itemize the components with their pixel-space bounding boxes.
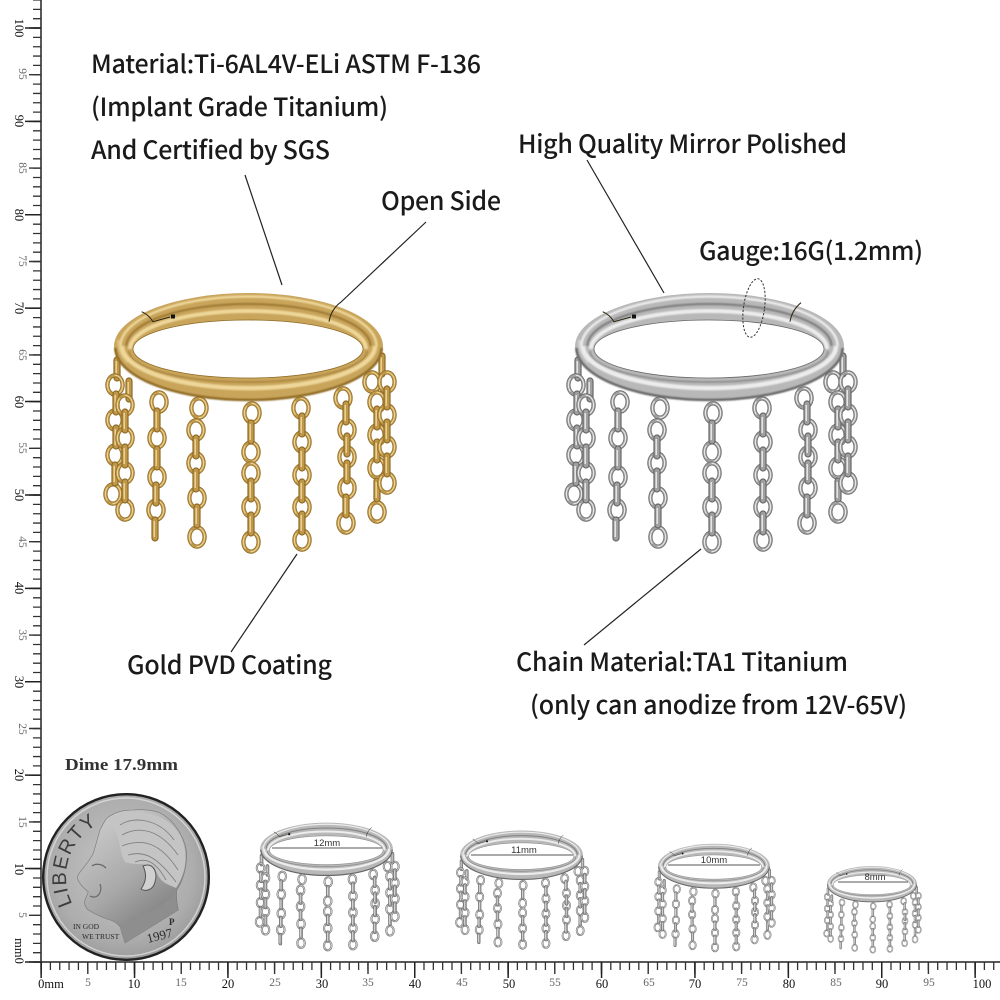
12mm ring: 12mm [314,838,340,849]
vertical ruler: 35 [16,629,28,641]
vertical ruler: 45 [16,536,28,548]
10mm ring: 10mm [701,855,727,866]
material specification text [91,45,481,167]
vertical ruler: 80 [12,209,26,221]
8mm ring: 8mm [864,872,886,883]
vertical ruler: 20 [12,769,26,781]
leader lines [231,160,701,652]
horizontal ruler [38,962,1000,991]
horizontal ruler: 35 [362,977,374,989]
vertical ruler: 95 [16,68,28,80]
vertical ruler: 100 [12,19,26,37]
gauge dotted ellipse [739,277,769,339]
vertical ruler: 65 [16,349,28,361]
label: gauge: Gauge:16G(1.2mm) [699,232,923,268]
horizontal ruler: 40 [409,977,421,991]
horizontal ruler: 100 [973,977,991,991]
label: chain material: Chain Material:TA1 Titanium [516,643,848,679]
label: gold coating: Gold PVD Coating [127,646,333,682]
11mm ring: 11mm [511,845,537,856]
vertical ruler: 40 [12,582,26,594]
horizontal ruler: 55 [549,977,561,989]
vertical ruler: 50 [12,489,26,501]
gold ring with chains [105,293,395,552]
horizontal ruler: 5 [85,977,91,989]
horizontal ruler: 75 [736,977,748,989]
horizontal ruler: 0mm [38,977,64,991]
horizontal ruler: 15 [175,977,187,989]
material specification text: (Implant Grade Titanium) [91,88,388,124]
vertical ruler: 25 [16,723,28,735]
dime coin: WE TRUST [82,932,120,941]
horizontal ruler: 60 [596,977,608,991]
11mm ring [456,831,588,949]
dime coin [42,793,210,961]
horizontal ruler: 85 [830,977,842,989]
label: chain material [516,643,907,722]
horizontal ruler: 45 [456,977,468,989]
dime coin: P [169,917,175,927]
silver ring with chains [566,293,856,552]
vertical ruler: 90 [12,115,26,127]
vertical ruler: 85 [16,162,28,174]
dime coin: IN GOD [73,922,100,931]
8mm ring [824,866,921,953]
horizontal ruler: 70 [689,977,701,991]
material specification text: And Certified by SGS [91,131,330,167]
horizontal ruler: 65 [643,977,655,989]
vertical ruler: 30 [12,676,26,688]
dime coin: 1997 [145,925,174,946]
label: open side: Open Side [381,182,501,218]
vertical ruler: 15 [16,816,28,828]
horizontal ruler: 25 [269,977,281,989]
label: mirror polished: High Quality Mirror Polished [518,125,847,161]
horizontal ruler: 80 [783,977,795,991]
vertical ruler: 5 [16,912,28,918]
vertical ruler: 10 [12,863,26,875]
material specification text: Material:Ti-6AL4V-ELi ASTM F-136 [91,45,481,81]
dime caption: Dime 17.9mm [65,755,178,774]
vertical ruler: mm0 [12,938,26,964]
horizontal ruler: 30 [316,977,328,991]
12mm ring [256,823,399,950]
horizontal ruler: 50 [503,977,515,991]
label: chain material: (only can anodize from 12V-65V) [530,686,907,722]
vertical ruler: 75 [16,255,28,267]
vertical ruler: 70 [12,302,26,314]
dime coin: LIBERTY [52,813,92,908]
horizontal ruler: 90 [876,977,888,991]
horizontal ruler: 10 [128,977,140,991]
vertical ruler [12,0,41,964]
vertical ruler: 60 [12,396,26,408]
horizontal ruler: 20 [222,977,234,991]
horizontal ruler: 95 [923,977,935,989]
vertical ruler: 55 [16,442,28,454]
10mm ring [654,844,775,951]
